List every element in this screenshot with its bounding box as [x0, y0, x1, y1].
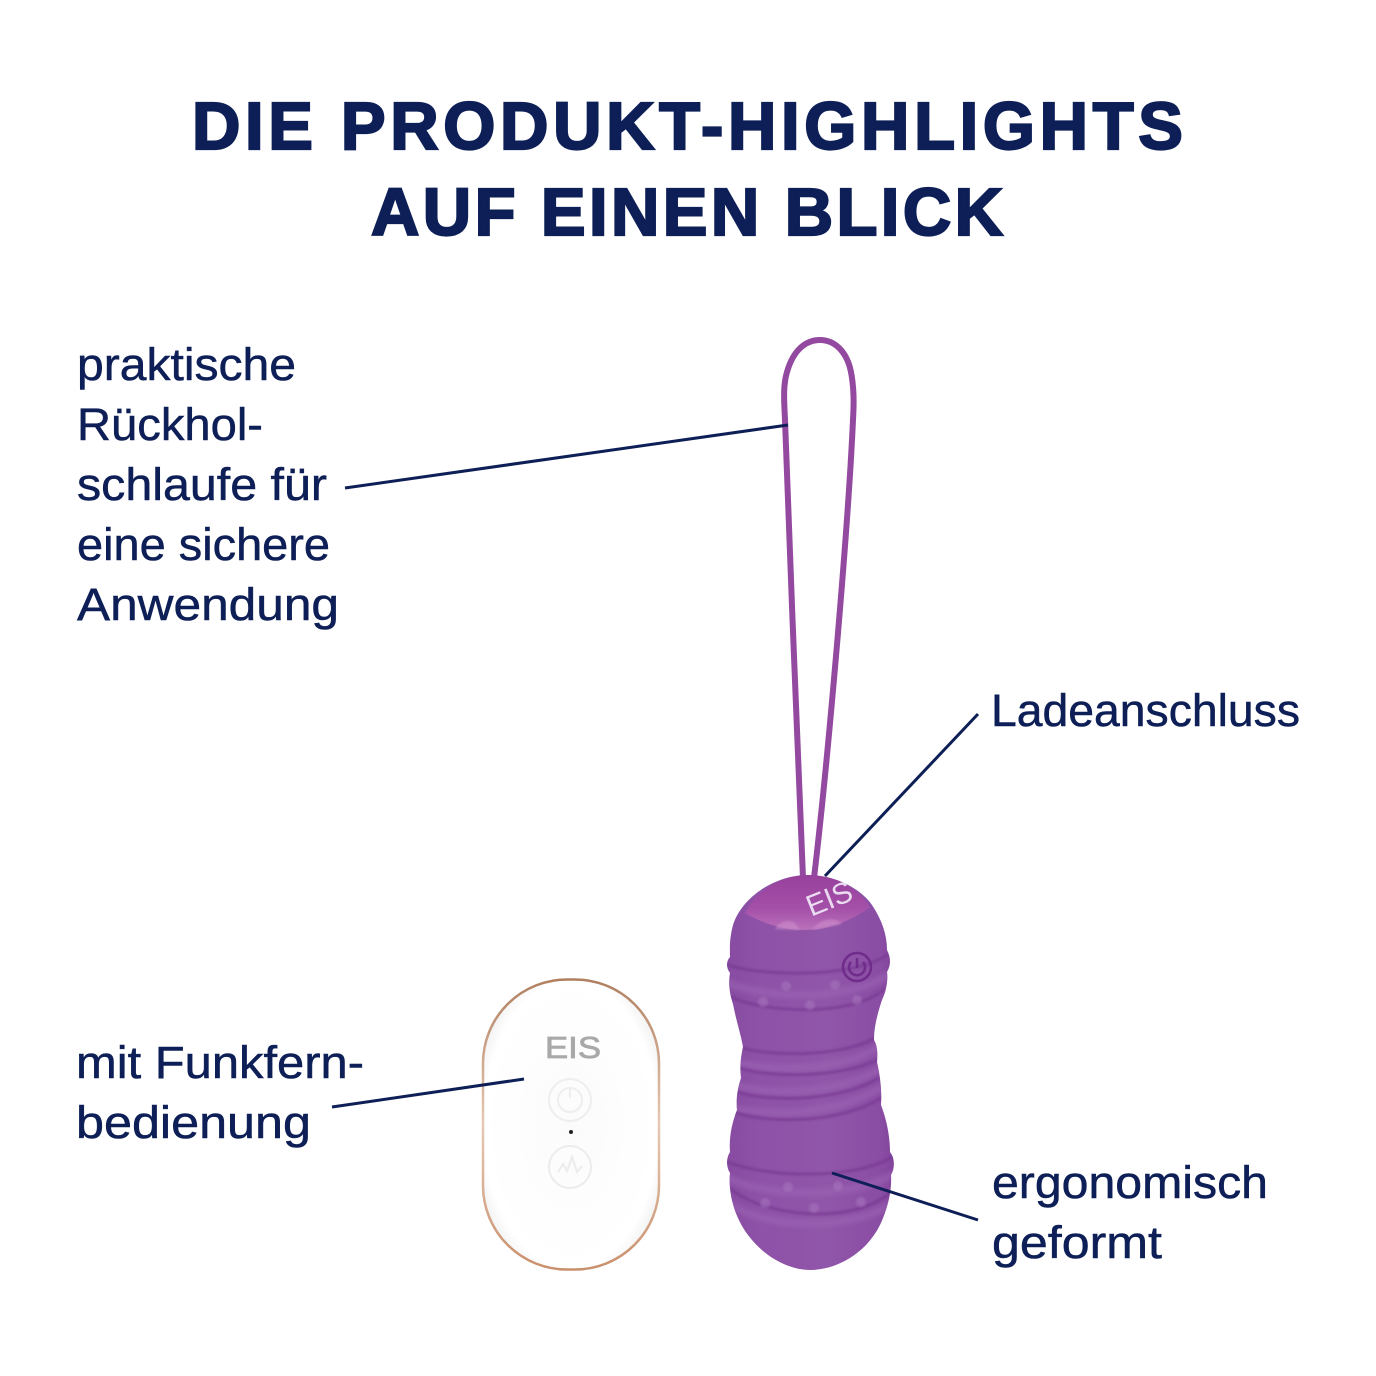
- title: AUF EINEN BLICK: [371, 175, 1003, 250]
- label: retrieval loop: praktische: [77, 339, 296, 390]
- label: retrieval loop: Anwendung: [77, 579, 339, 630]
- cap highlights: [775, 919, 842, 930]
- label: charging port: Ladeanschluss: [991, 685, 1300, 736]
- callout line: charging port: [825, 714, 978, 876]
- label: ergonomic shape: geformt: [992, 1217, 1163, 1268]
- label: remote control: bedienung: [76, 1097, 311, 1148]
- label: retrieval loop: Rückhol-: [77, 399, 263, 450]
- top cap: [745, 875, 870, 930]
- title: [192, 89, 1183, 250]
- title: DIE PRODUKT-HIGHLIGHTS: [192, 89, 1183, 164]
- callout line: remote: [332, 1079, 524, 1107]
- label: ergonomic shape: ergonomisch: [992, 1157, 1268, 1208]
- label: ergonomic shape: [992, 1157, 1268, 1268]
- label: retrieval loop: eine sichere: [77, 519, 330, 570]
- cap logo: EIS: [801, 875, 857, 923]
- remote control: [483, 980, 659, 1270]
- main purple shape: [727, 875, 894, 1270]
- ribs: [728, 955, 892, 1224]
- label: remote control: [76, 1037, 364, 1148]
- callout line: loop: [345, 425, 788, 488]
- label: remote control: mit Funkfern-: [76, 1037, 364, 1088]
- remote logo: EIS: [545, 1030, 601, 1065]
- product body: [727, 875, 894, 1270]
- callout line: body: [832, 1173, 978, 1220]
- nubs: [758, 980, 866, 1213]
- icon: remote wave button: [549, 1146, 591, 1188]
- retrieval loop cord: [784, 340, 854, 878]
- label: retrieval loop: [77, 339, 339, 630]
- label: retrieval loop: schlaufe für: [77, 459, 327, 510]
- remote indicator dot: [569, 1130, 573, 1134]
- icon: remote power button: [549, 1079, 591, 1121]
- icon: power button: [843, 953, 871, 981]
- remote body: [483, 980, 659, 1270]
